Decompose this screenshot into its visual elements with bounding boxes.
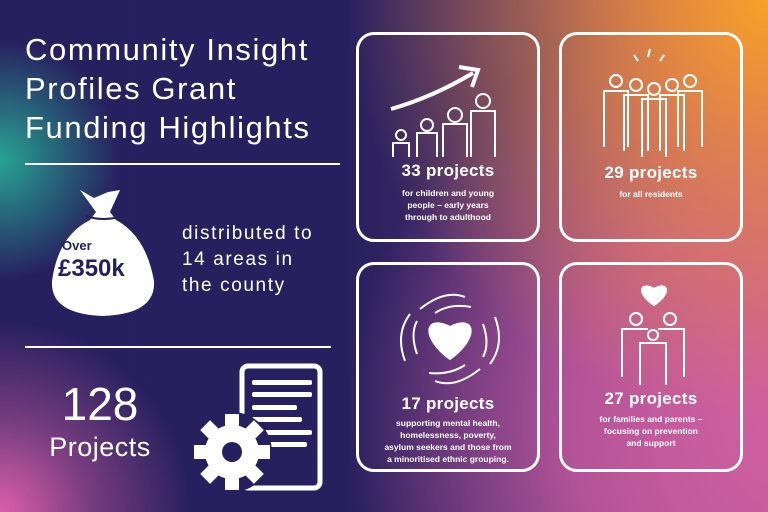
panel: children: through to adulthood (405, 212, 491, 222)
panel: children: for children and young (402, 188, 494, 198)
panel: mental health: asylum seekers and those from (384, 442, 512, 452)
icon: document with gear (194, 364, 322, 490)
panel: mental health: 17 projects (401, 394, 495, 413)
panel: all residents: 29 projects (604, 163, 698, 182)
panel: mental health: homelessness, poverty, (400, 430, 496, 440)
icon: crowd (603, 48, 703, 157)
panel: families (559, 262, 743, 472)
stat: 128 projects: Projects (49, 432, 151, 462)
panel: families: and support (626, 438, 676, 448)
panel: children (356, 32, 540, 242)
title: Funding Highlights (25, 110, 311, 145)
icon: money bag: £350k (58, 255, 125, 282)
text: distributed: the county (182, 275, 286, 296)
panel: mental health (356, 262, 540, 472)
icon: family with heart (621, 285, 685, 385)
panel: all residents (559, 32, 743, 242)
icon: hands around heart (400, 294, 500, 384)
panel: mental health: a minoritised ethnic grouping. (387, 454, 509, 464)
panel: families: for families and parents – (600, 414, 702, 424)
text: distributed: 14 areas in (182, 249, 294, 270)
panel: families: focusing on prevention (604, 426, 698, 436)
panel: families: 27 projects (604, 389, 698, 408)
stat: 128 projects: 128 (62, 378, 138, 430)
title: Community Insight (25, 32, 309, 67)
icon: growing people (390, 65, 496, 157)
text: distributed (182, 223, 313, 296)
icon: money bag (52, 190, 154, 316)
panel: children: 33 projects (401, 161, 495, 180)
panel: children: people – early years (407, 200, 489, 210)
title (25, 32, 311, 145)
title: Profiles Grant (25, 71, 237, 106)
panel: mental health: supporting mental health, (396, 418, 500, 428)
icon: money bag: Over (62, 238, 92, 253)
panel: all residents: for all residents (619, 189, 683, 199)
text: distributed: distributed to (182, 223, 313, 244)
stat: 128 projects (49, 378, 151, 462)
